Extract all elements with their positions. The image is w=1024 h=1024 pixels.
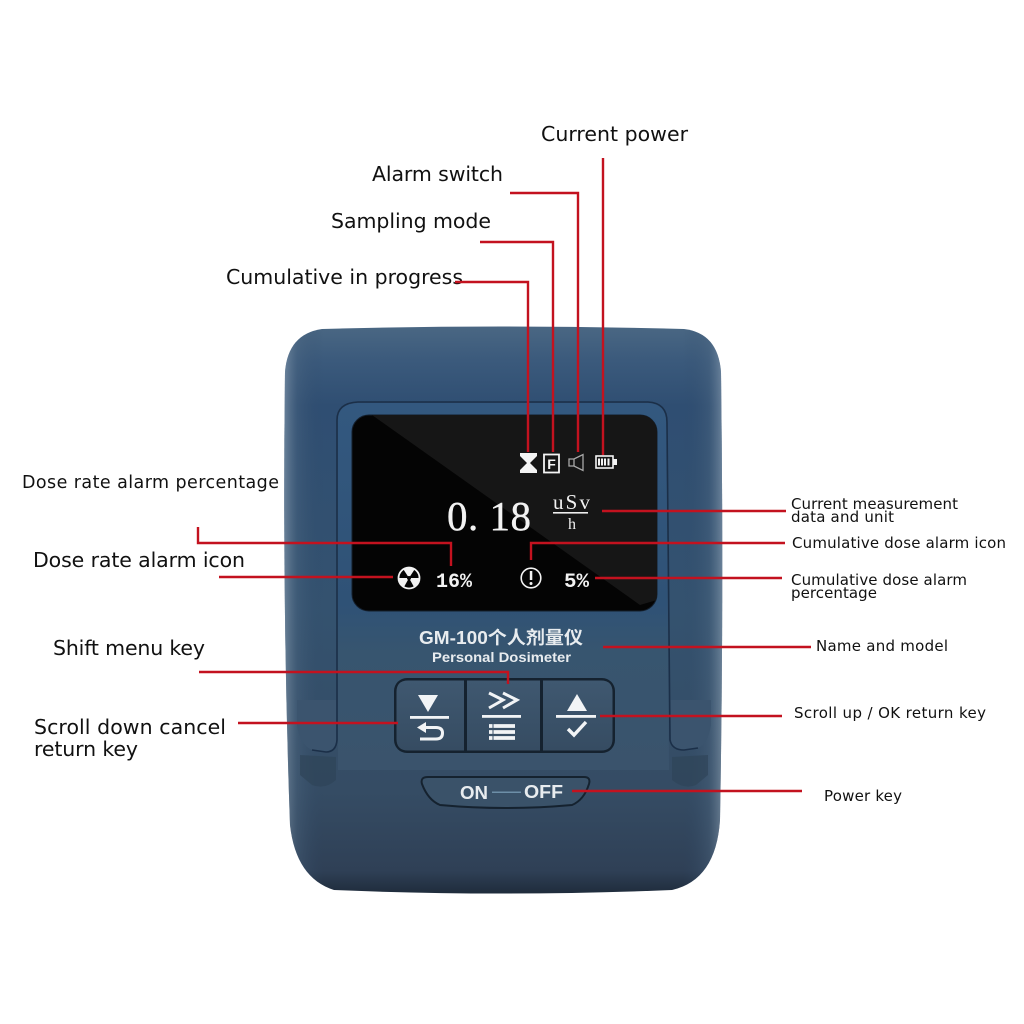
callout: current measurement data and unit <box>602 495 958 526</box>
power key: ON <box>460 783 488 803</box>
panel: dosimeter device <box>284 326 722 894</box>
callout: scroll down cancel return key: Scroll down cancel <box>34 715 226 739</box>
left rail lower shade <box>297 700 336 752</box>
callout: cumulative dose alarm percentage <box>595 571 967 602</box>
callout: cumulative dose alarm icon: Cumulative dose alarm icon <box>792 534 1006 552</box>
icon: radiation <box>398 568 420 588</box>
callout: sampling mode <box>331 209 553 452</box>
icon: F sampling mode <box>544 454 559 472</box>
callout: alarm switch: Alarm switch <box>372 162 503 186</box>
callout: current measurement data and unit: data and unit <box>791 508 894 526</box>
unit: uSv per h: h <box>568 516 576 533</box>
right rail lower shade <box>670 700 711 750</box>
body edge highlight <box>284 326 722 894</box>
product name: GM-100个人剂量仪 <box>419 627 583 648</box>
callout: name and model: Name and model <box>816 637 948 655</box>
screen reflection <box>372 415 657 605</box>
cumulative percentage: 5% <box>564 571 590 594</box>
callout: cumulative dose alarm icon <box>531 534 1006 560</box>
callout: cumulative dose alarm percentage: percentage <box>791 584 877 602</box>
callout: sampling mode: Sampling mode <box>331 209 491 233</box>
key: shift menu <box>467 680 540 750</box>
display panel <box>352 415 657 611</box>
bezel frame <box>312 402 698 752</box>
icon: speaker <box>569 454 583 470</box>
callout: scroll down cancel return key: return key <box>34 737 138 761</box>
callout: shift menu key <box>53 636 508 684</box>
callout: cumulative in progress <box>226 265 528 452</box>
keypad <box>394 678 615 753</box>
callout: cumulative in progress: Cumulative in progress <box>226 265 463 289</box>
callout: cumulative dose alarm percentage: Cumulative dose alarm <box>791 571 967 589</box>
key: scroll down <box>396 680 464 750</box>
callout: dose rate alarm percentage: Dose rate alarm percentage <box>22 473 279 493</box>
product name: Personal Dosimeter <box>432 649 572 665</box>
icon: F sampling mode: F <box>547 456 556 472</box>
power key <box>422 777 589 808</box>
callout: power key: Power key <box>824 787 902 805</box>
dose reading: 0. 18 <box>447 493 531 539</box>
icon: battery <box>596 456 617 468</box>
callout: alarm switch <box>372 162 578 452</box>
left lower recess <box>300 755 336 787</box>
device body <box>284 326 722 894</box>
callout: scroll up OK return key: Scroll up / OK return key <box>794 704 986 722</box>
power key: OFF <box>524 782 563 802</box>
callout: shift menu key: Shift menu key <box>53 636 205 660</box>
icon: alert circle <box>521 568 541 588</box>
callout: dose rate alarm icon: Dose rate alarm icon <box>33 548 245 572</box>
callout: dose rate alarm percentage <box>22 473 451 566</box>
dose rate percentage: 16% <box>436 571 473 594</box>
unit: uSv per h: uSv <box>553 490 590 514</box>
unit: uSv per h <box>553 490 590 533</box>
right lower recess <box>672 755 708 787</box>
callout: current power: Current power <box>541 122 689 146</box>
callout: scroll down cancel return key <box>34 715 398 761</box>
front face <box>338 403 669 770</box>
product name <box>419 627 583 665</box>
key: scroll up <box>543 680 612 750</box>
callout: current measurement data and unit: Current measurement <box>791 495 958 513</box>
icon: hourglass <box>520 453 537 473</box>
